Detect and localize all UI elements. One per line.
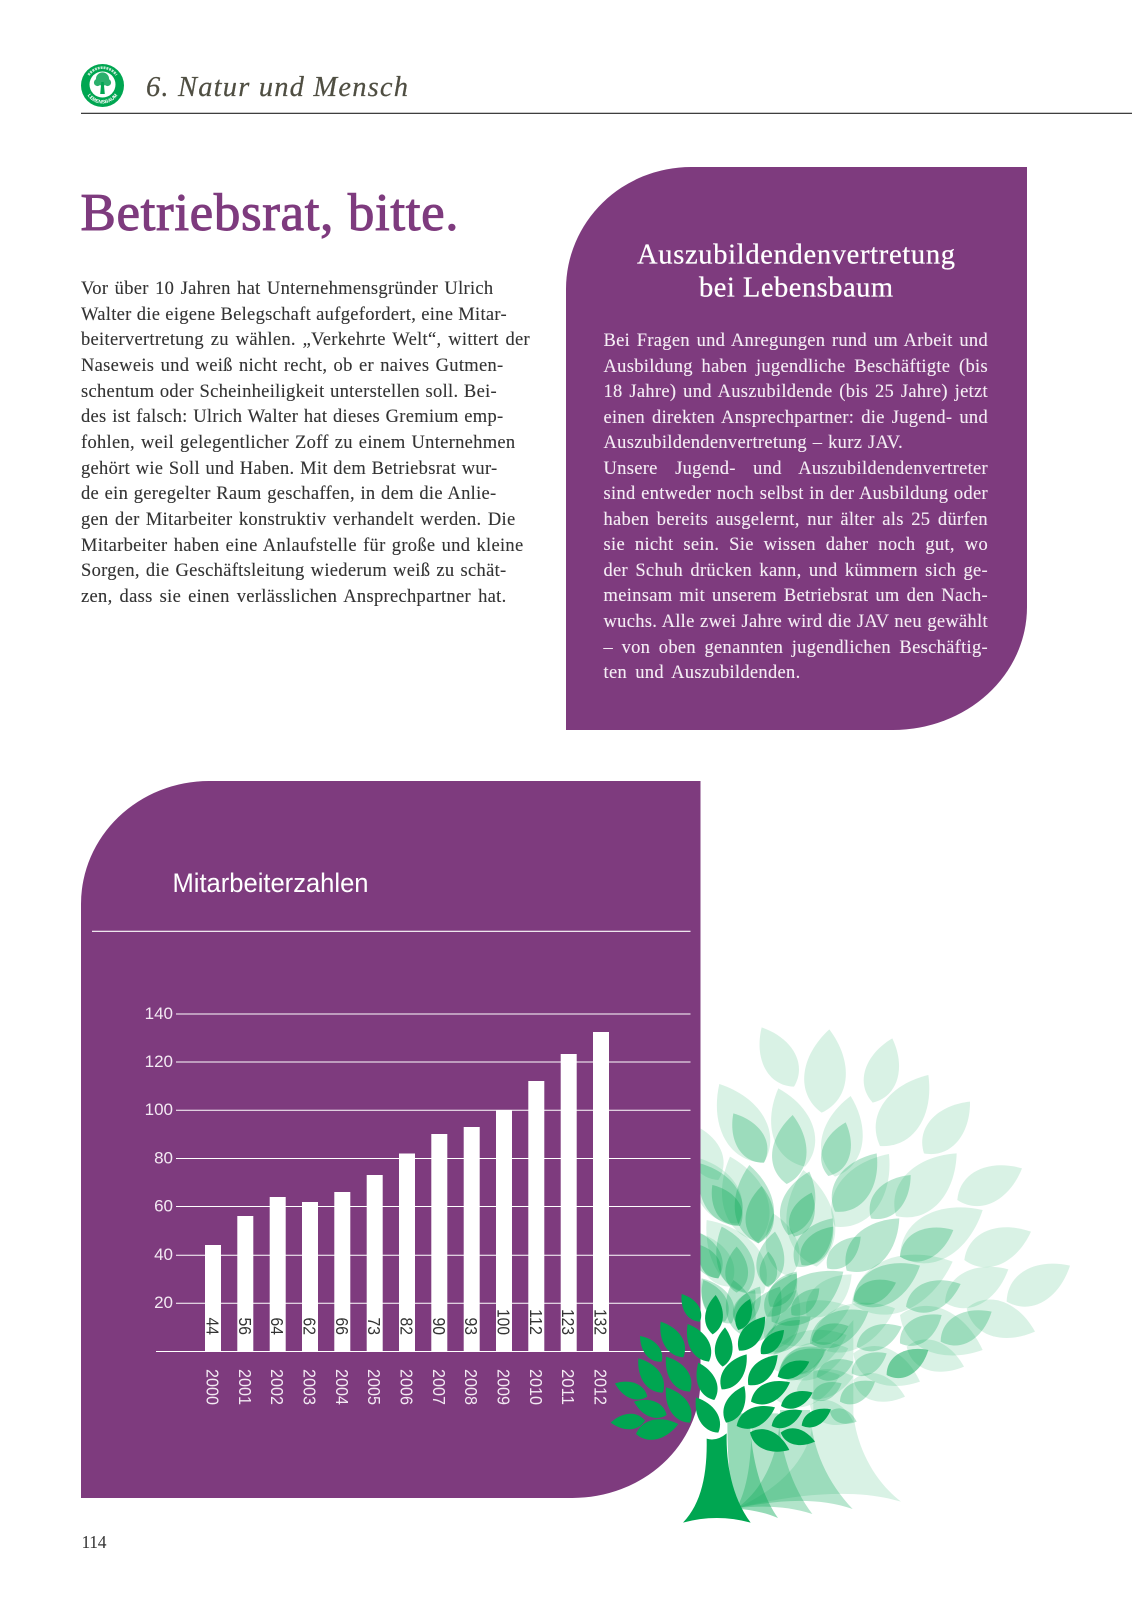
body text: purple panel: sind entweder noch selbst in der Ausbildung oder xyxy=(604,484,988,504)
body text: purple panel: meinsam mit unserem Betriebsrat um den Nach- xyxy=(604,586,988,606)
tree: translucent echo foliage and trunks xyxy=(676,1019,1079,1518)
body text: purple panel: Unsere Jugend- und Auszubildendenvertreter xyxy=(604,459,988,479)
body text: left column: gehört wie Soll und Haben. Mit dem Betriebsrat wur- xyxy=(81,459,498,479)
body text: purple panel: haben bereits ausgelernt, nur älter als 25 dürfen xyxy=(604,510,988,530)
body text: left column: des ist falsch: Ulrich Walter hat dieses Gremium emp- xyxy=(81,407,504,427)
bar chart: employee numbers 2000–2012: 100 xyxy=(494,1309,514,1335)
bar chart: employee numbers 2000–2012: 2010 xyxy=(526,1369,546,1405)
body text: left column: beitervertretung zu wählen. „Verkehrte Welt“, wittert der xyxy=(81,330,530,350)
bar chart: employee numbers 2000–2012: 2011 xyxy=(558,1369,578,1405)
bar chart: employee numbers 2000–2012: 2005 xyxy=(364,1369,384,1405)
body text: left column: fohlen, weil gelegentlicher Zoff zu einem Unternehmen xyxy=(81,433,516,453)
body text: left column: Naseweis und weiß nicht recht, ob er naives Gutmen- xyxy=(81,356,504,376)
body text: left column: Sorgen, die Geschäftsleitung wiederum weiß zu schät- xyxy=(81,561,506,581)
bar chart: employee numbers 2000–2012: 90 xyxy=(429,1318,449,1335)
body text: purple panel: wuchs. Alle zwei Jahre wird die JAV neu gewählt xyxy=(604,612,988,632)
tree: solid green foreground xyxy=(610,1290,835,1523)
bar chart: employee numbers 2000–2012: 2000 xyxy=(202,1369,222,1405)
panel heading: Auszubildendenvertretung xyxy=(637,240,955,270)
title: Betriebsrat, bitte. xyxy=(80,184,458,242)
panel: Auszubildendenvertretung xyxy=(566,167,1027,730)
panel heading: bei Lebensbaum xyxy=(699,272,893,304)
bar chart: employee numbers 2000–2012: 2012 xyxy=(590,1369,610,1405)
body text: left column: schentum oder Scheinheiligkeit unterstellen soll. Bei- xyxy=(81,382,497,402)
bar chart: employee numbers 2000–2012: 40 xyxy=(154,1245,173,1264)
chart heading: Mitarbeiterzahlen xyxy=(172,868,368,898)
bar chart: employee numbers 2000–2012: 44 xyxy=(202,1318,222,1335)
icon: Lebensbaum logo xyxy=(81,64,124,107)
icon: Lebensbaum logo: LEBENSBAUM xyxy=(88,94,118,104)
body text: purple panel: ten und Auszubildenden. xyxy=(604,663,800,683)
bar chart: employee numbers 2000–2012: 93 xyxy=(461,1318,481,1335)
body text: left column: gen der Mitarbeiter konstruktiv verhandelt werden. Die xyxy=(81,510,516,530)
chapter heading: 6. Natur und Mensch xyxy=(146,72,408,103)
bar chart: employee numbers 2000–2012: 73 xyxy=(364,1318,384,1335)
bar chart: employee numbers 2000–2012: 2006 xyxy=(396,1369,416,1405)
bar chart: employee numbers 2000–2012: 132 xyxy=(590,1309,610,1335)
bar chart: employee numbers 2000–2012: 80 xyxy=(154,1148,173,1168)
body text: left column: Mitarbeiter haben eine Anlaufstelle für große und kleine xyxy=(81,536,524,556)
body text: left column xyxy=(80,279,530,607)
body text: purple panel: 18 Jahre) und Auszubildende (bis 25 Jahre) jetzt xyxy=(604,382,988,402)
body text: purple panel: einen direkten Ansprechpartner: die Jugend- und xyxy=(604,408,988,428)
bar chart: employee numbers 2000–2012: 62 xyxy=(300,1318,320,1335)
body text: purple panel: der Schuh drücken kann, und kümmern sich ge- xyxy=(604,561,988,581)
bar chart: employee numbers 2000–2012: 112 xyxy=(526,1309,546,1335)
bar chart: employee numbers 2000–2012: 2008 xyxy=(461,1369,481,1405)
bar chart: employee numbers 2000–2012: 2003 xyxy=(300,1369,320,1405)
body text: purple panel: Auszubildendenvertretung – kurz JAV. xyxy=(604,433,903,453)
bar chart: employee numbers 2000–2012: 100 xyxy=(145,1100,173,1119)
bar chart: employee numbers 2000–2012: 2007 xyxy=(429,1369,449,1405)
bar chart: employee numbers 2000–2012: 2001 xyxy=(235,1369,255,1405)
body text: left column: Vor über 10 Jahren hat Unternehmensgründer Ulrich xyxy=(81,279,494,299)
body text: purple panel: Bei Fragen und Anregungen rund um Arbeit und xyxy=(604,331,988,351)
body text: left column: zen, dass sie einen verlässlichen Ansprechpartner hat. xyxy=(81,587,506,607)
bar chart: employee numbers 2000–2012: 123 xyxy=(558,1309,578,1335)
page number: 114 xyxy=(82,1532,107,1552)
bar chart: employee numbers 2000–2012: 120 xyxy=(145,1052,173,1071)
bar chart: employee numbers 2000–2012: 20 xyxy=(154,1293,173,1312)
bar chart: employee numbers 2000–2012: 82 xyxy=(396,1318,416,1335)
body text: left column: de ein geregelter Raum geschaffen, in dem die Anlie- xyxy=(81,484,496,504)
body text: purple panel xyxy=(603,331,988,683)
body text: purple panel: – von oben genannten jugendlichen Beschäftig- xyxy=(604,638,988,658)
body text: purple panel: Ausbildung haben jugendliche Beschäftigte (bis xyxy=(604,357,988,377)
bar chart: employee numbers 2000–2012: 2004 xyxy=(332,1369,352,1405)
bar chart: employee numbers 2000–2012: 140 xyxy=(145,1004,173,1023)
bar chart: employee numbers 2000–2012: 66 xyxy=(332,1318,352,1335)
bar chart: employee numbers 2000–2012: 2002 xyxy=(267,1369,287,1405)
bar chart: employee numbers 2000–2012: 56 xyxy=(235,1318,255,1335)
body text: purple panel: sie nicht sein. Sie wissen daher noch gut, wo xyxy=(604,535,988,555)
bar chart: employee numbers 2000–2012: 60 xyxy=(154,1196,173,1216)
panel: Mitarbeiterzahlen xyxy=(81,781,700,1498)
bar chart: employee numbers 2000–2012: 64 xyxy=(267,1318,287,1335)
bar chart: employee numbers 2000–2012: 2009 xyxy=(494,1369,514,1405)
body text: left column: Walter die eigene Belegschaft aufgefordert, eine Mitar- xyxy=(81,305,507,325)
bar chart: employee numbers 2000–2012 xyxy=(145,1004,690,1405)
